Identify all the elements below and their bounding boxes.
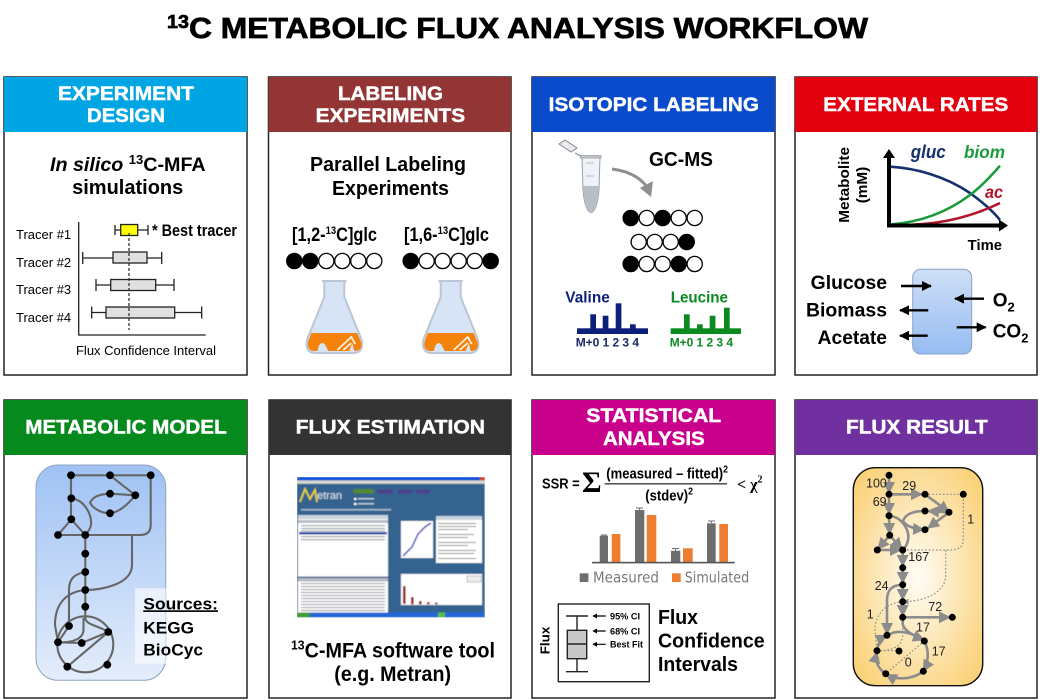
header: labeling experiments: LABELING [338, 84, 443, 105]
tracer 1,2 with atoms: C]glc [336, 225, 377, 246]
caption: software tool: C-MFA software tool [305, 639, 495, 662]
tracer 1,2 with atoms [287, 225, 382, 269]
panel: metabolic model [4, 400, 247, 698]
caption: software tool: 13 [291, 637, 305, 652]
cell exchange diagram: 2 [1021, 331, 1028, 346]
flux map network: 17 [932, 645, 946, 659]
flux map network: 17 [916, 621, 930, 635]
header: statistical analysis: STATISTICAL [586, 406, 722, 427]
flux map network: 24 [875, 579, 889, 593]
cell exchange diagram: Glucose [811, 273, 887, 294]
flux map network: 100 [866, 476, 887, 490]
tracer 1,6 with atoms: 13 [438, 225, 448, 237]
flux map network: 29 [902, 479, 916, 493]
tracer 1,6 with atoms: C]glc [448, 225, 489, 246]
legend: measured, simulated [580, 569, 749, 587]
line chart: metabolite over time: biom [964, 142, 1005, 162]
flux map network [853, 468, 983, 686]
header: isotopic labeling: ISOTOPIC LABELING [549, 95, 759, 116]
subtitle: in silico simulations: In silico [50, 154, 123, 176]
formula: SSR: SSR = [542, 475, 580, 492]
formula: SSR: 2 [688, 487, 693, 498]
cell exchange diagram: O [993, 291, 1007, 312]
cell exchange diagram: Acetate [818, 328, 887, 349]
subtitle: parallel labeling experiments: Experiments [332, 178, 449, 200]
icon: flask 1 [307, 281, 362, 353]
flux map network: 69 [873, 495, 887, 509]
title: C METABOLIC FLUX ANALYSIS WORKFLOW [189, 13, 869, 45]
subtitle: in silico simulations: C-MFA [143, 154, 206, 176]
line chart: metabolite over time: ac [985, 182, 1003, 202]
cell exchange diagram [806, 269, 1028, 354]
line chart: metabolite over time: Metabolite [837, 147, 853, 223]
header: metabolic model [4, 400, 247, 455]
box plot: tracers: Tracer #3 [16, 282, 71, 297]
panel: statistical analysis [532, 400, 775, 698]
header: flux result [795, 400, 1037, 455]
subtitle: in silico simulations: simulations [72, 177, 183, 199]
header: experiment design: DESIGN [87, 106, 165, 127]
flux map network: 1 [867, 607, 874, 621]
callout: sources [135, 588, 218, 664]
metabolic network [36, 465, 166, 680]
panel: flux estimation [269, 400, 511, 698]
header: experiment design [4, 77, 247, 132]
flux map network: 167 [908, 550, 929, 564]
label: GC-MS: GC-MS [649, 149, 713, 171]
flux confidence box plot key: 68% CI [610, 626, 640, 637]
formula: SSR: (measured – fitted) [606, 465, 741, 482]
tracer 1,2 with atoms: [1,2- [292, 225, 331, 246]
header: external rates: EXTERNAL RATES [823, 95, 1008, 116]
subtitle: parallel labeling experiments [310, 154, 466, 200]
legend: measured, simulated: Measured [593, 569, 659, 587]
header: metabolic model: METABOLIC MODEL [25, 417, 227, 438]
chart: valine mass isotopomers: Valine [565, 289, 610, 306]
chart: valine mass isotopomers: M+0 1 2 3 4 [576, 336, 639, 350]
line chart: metabolite over time: (mM) [855, 167, 871, 203]
header: flux estimation: FLUX ESTIMATION [296, 417, 485, 438]
formula: SSR: Σ [582, 466, 602, 499]
formula: SSR: (stdev) [645, 488, 694, 505]
tracer 1,6 with atoms: [1,6- [404, 225, 443, 246]
icon: flask 2 [423, 281, 478, 353]
chart: leucine mass isotopomers [670, 289, 741, 350]
arrow: tube to fragments [612, 169, 653, 197]
header: flux estimation [269, 400, 511, 455]
tracer 1,2 with atoms: 13 [326, 225, 336, 237]
callout: sources: BioCyc [143, 642, 203, 660]
header: flux result: FLUX RESULT [846, 417, 988, 438]
header: statistical analysis: ANALYSIS [603, 429, 705, 450]
label: flux confidence intervals: Intervals [658, 654, 738, 676]
label: flux confidence intervals: Confidence [658, 631, 765, 653]
mass fragments atoms [623, 210, 702, 272]
flux confidence box plot key: Flux [538, 626, 553, 654]
cell exchange diagram: Biomass [806, 301, 887, 322]
subtitle: parallel labeling experiments: Parallel Labeling [310, 154, 466, 176]
callout: sources: KEGG [143, 620, 194, 638]
formula: SSR [542, 464, 763, 505]
header: statistical analysis [532, 400, 775, 455]
software screenshot: Metran: etran [317, 490, 342, 502]
panel: flux result [795, 400, 1037, 698]
cell exchange diagram: CO [993, 322, 1021, 343]
chart: valine mass isotopomers [565, 289, 648, 350]
flux map network: 1 [967, 512, 974, 526]
flux confidence box plot key [538, 604, 649, 682]
panel: isotopic labeling [532, 77, 775, 375]
flux confidence box plot key: Best Fit [610, 640, 644, 651]
panel: experiment design [4, 77, 247, 375]
header: labeling experiments: EXPERIMENTS [316, 106, 465, 127]
label: flux confidence intervals [658, 607, 765, 676]
flux map network: 0 [905, 656, 912, 670]
formula: SSR: 2 [723, 464, 728, 475]
flux map network: 72 [928, 600, 942, 614]
callout: sources: Sources: [143, 595, 218, 613]
box plot: tracers: Tracer #1 [16, 227, 71, 242]
box plot: tracers: Tracer #4 [16, 310, 71, 325]
flux confidence box plot key: 95% CI [610, 611, 640, 622]
bar chart: measured vs simulated [592, 508, 735, 563]
header: isotopic labeling [532, 77, 775, 132]
legend: measured, simulated: Simulated [685, 569, 749, 587]
box plot: tracers [16, 221, 237, 358]
tracer 1,6 with atoms [403, 225, 498, 269]
header: experiment design: EXPERIMENT [58, 84, 194, 105]
title: 13 [167, 12, 189, 32]
line chart: metabolite over time: gluc [910, 142, 946, 162]
panel: labeling experiments [268, 77, 511, 375]
chart: leucine mass isotopomers: Leucine [671, 289, 728, 306]
box plot: tracers: * Best tracer [152, 221, 237, 240]
header: labeling experiments [268, 77, 511, 132]
caption: software tool: (e.g. Metran) [334, 663, 451, 686]
box plot: tracers: Tracer #2 [16, 255, 71, 270]
cell exchange diagram: 2 [1007, 300, 1015, 315]
subtitle: in silico simulations: 13 [129, 152, 143, 167]
box plot: tracers: Flux Confidence Interval [76, 344, 216, 358]
header: external rates [795, 77, 1037, 132]
line chart: metabolite over time: Time [968, 238, 1002, 254]
icon: sample tube [559, 140, 601, 212]
formula: SSR: 2 [758, 474, 763, 485]
subtitle: in silico simulations [50, 152, 206, 199]
panel: external rates [795, 77, 1037, 375]
label: flux confidence intervals: Flux [658, 607, 698, 629]
caption: software tool [291, 637, 495, 686]
formula: SSR: < χ [737, 476, 758, 493]
line chart: metabolite over time [837, 142, 1008, 254]
software screenshot: Metran [297, 477, 485, 617]
chart: leucine mass isotopomers: M+0 1 2 3 4 [670, 336, 733, 350]
